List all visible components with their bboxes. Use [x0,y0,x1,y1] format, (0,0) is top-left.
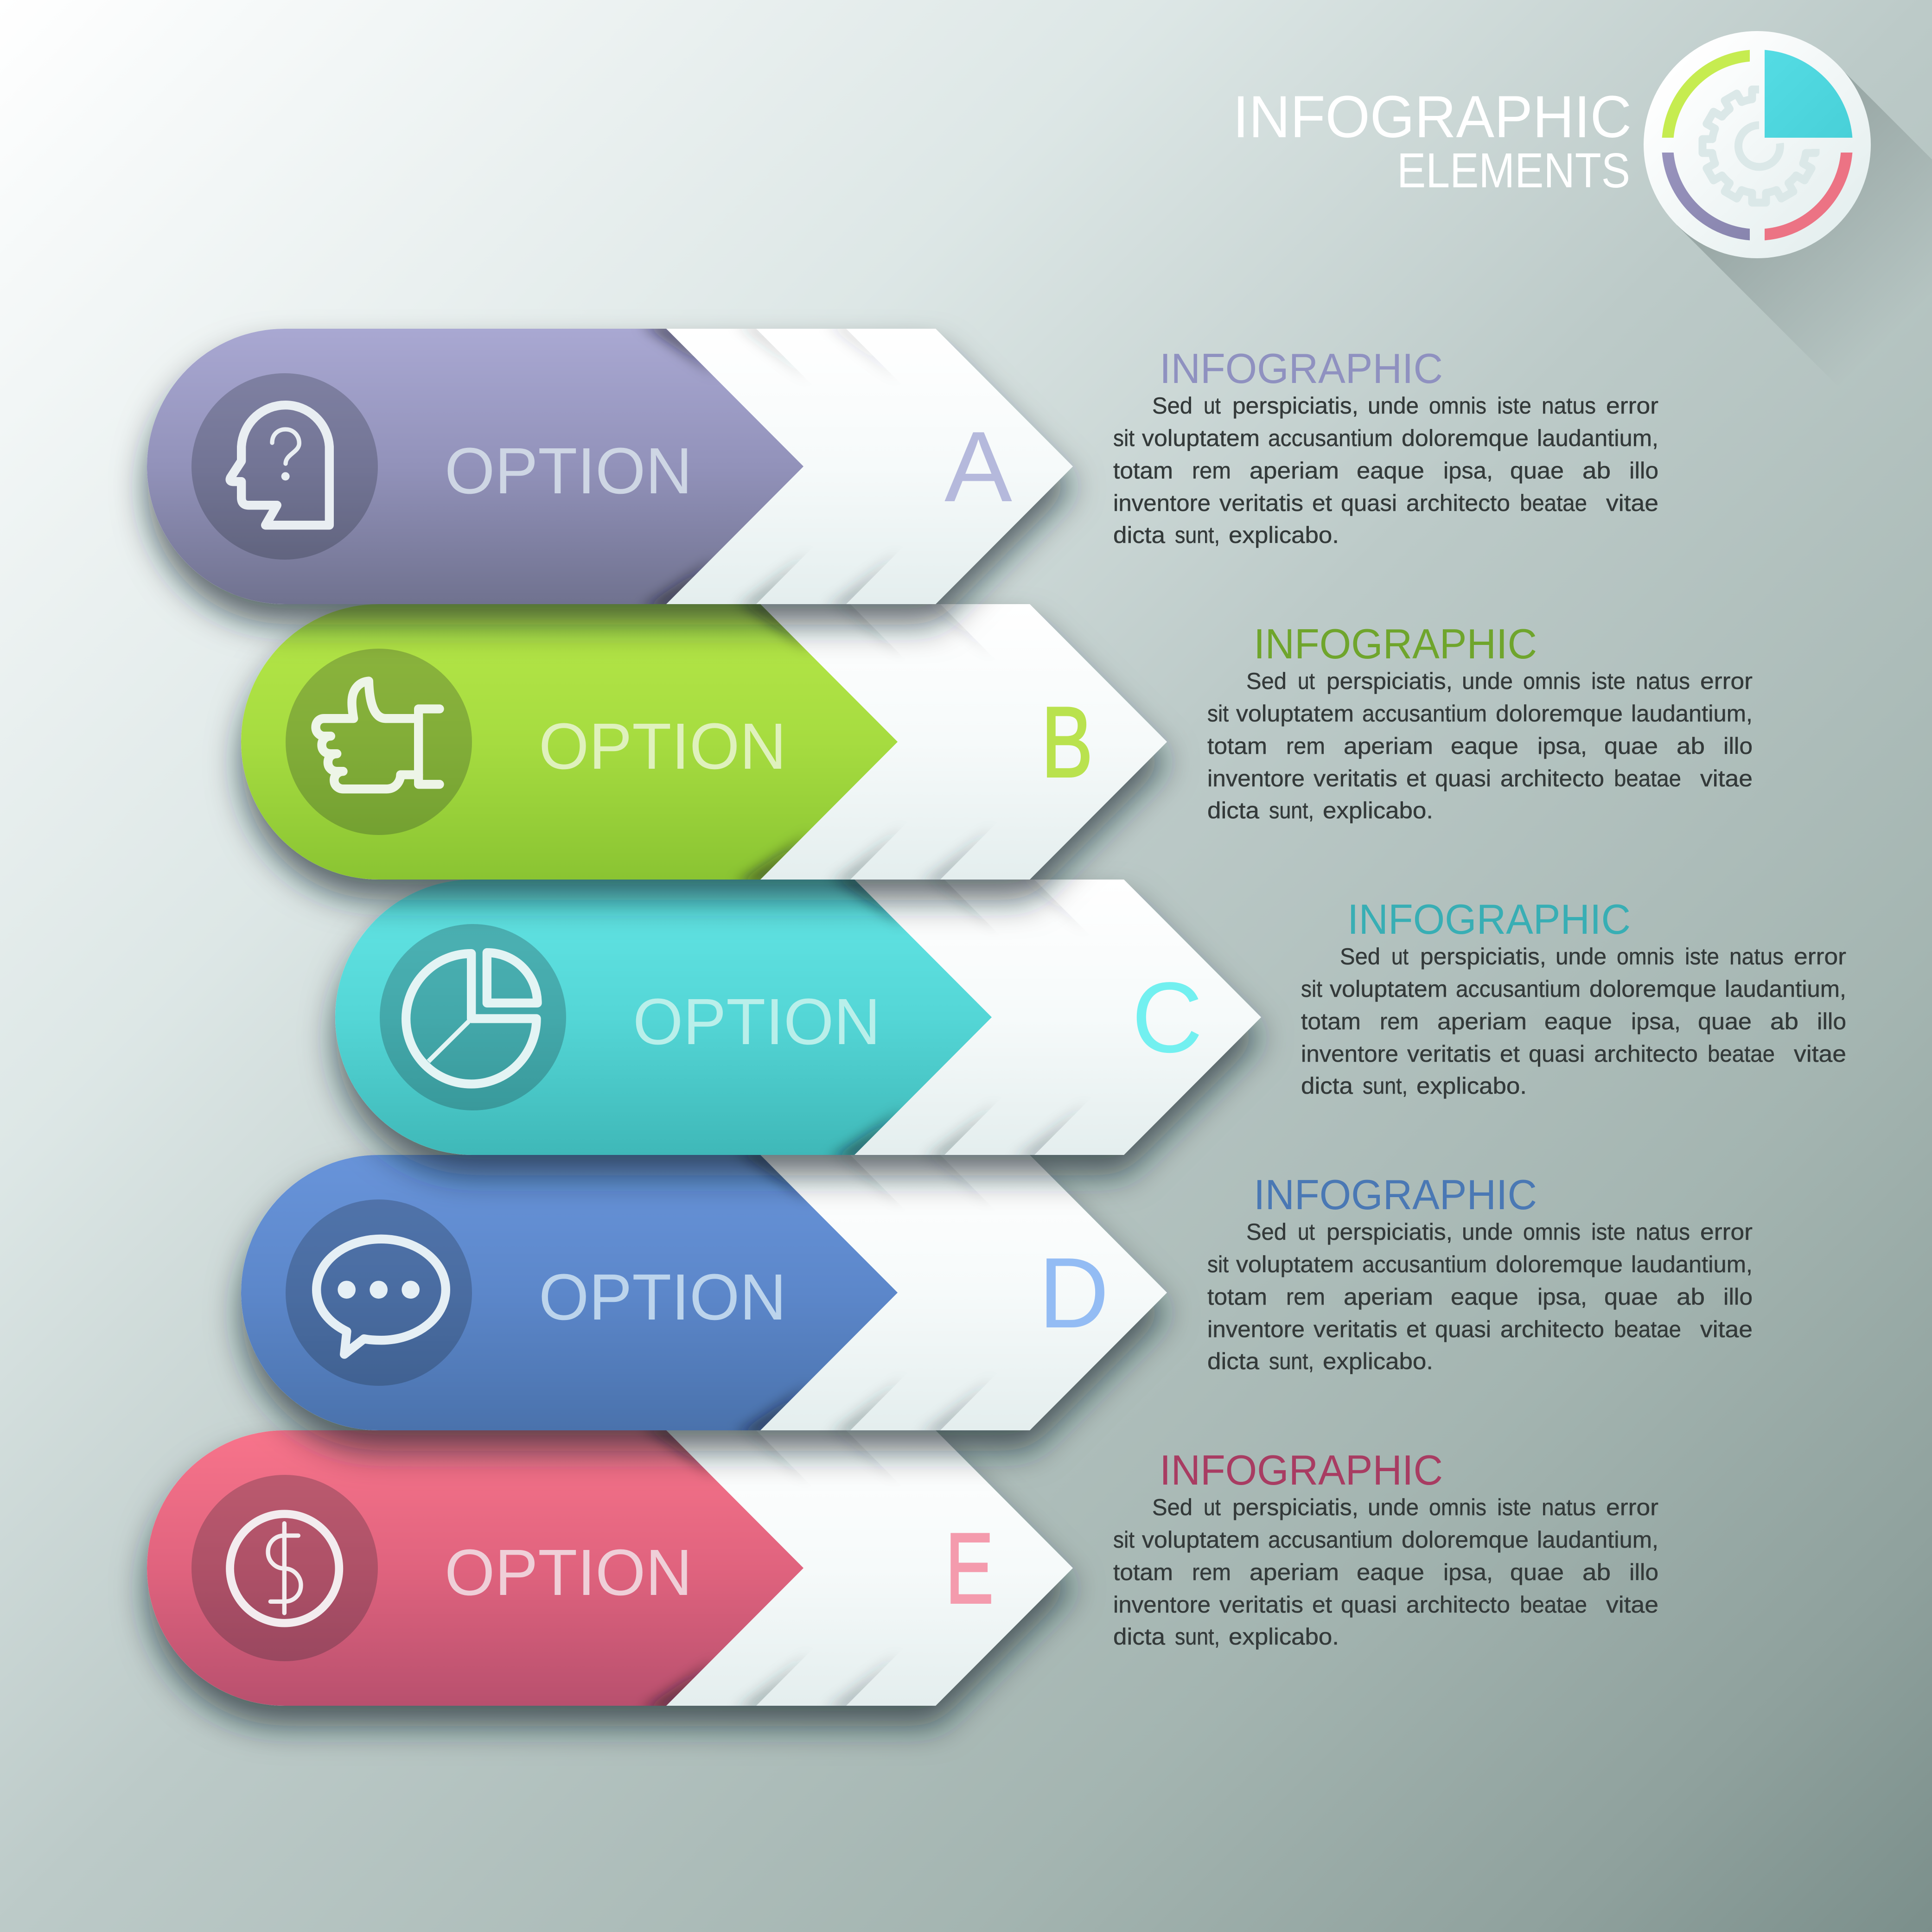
text block C: quasi [1529,1041,1585,1067]
text block A: veritatis [1219,490,1303,516]
text block C: accusantium [1456,976,1581,1002]
text block A: aperiam [1250,458,1339,484]
text block B: voluptatem [1236,701,1354,727]
text block C: illo [1817,1008,1846,1034]
panel: option A [147,324,1073,609]
text block B: beatae [1614,765,1681,791]
title: ELEMENTS [1397,143,1630,198]
text block B: iste [1591,668,1626,694]
text block B: ab [1677,733,1705,759]
text block D: illo [1723,1284,1753,1310]
text block B: aperiam [1344,733,1433,759]
text block A: omnis [1429,393,1486,419]
text block C: dicta [1301,1073,1353,1099]
text block D: eaque [1451,1284,1518,1310]
text block A: unde [1368,393,1419,419]
text block D: veritatis [1314,1316,1397,1342]
text block A: doloremque [1402,425,1529,451]
text block C: aperiam [1437,1008,1527,1034]
option label E: OPTION [445,1536,692,1609]
icon: thumbs up [316,681,440,789]
text block A: voluptatem [1142,425,1260,451]
text block E: sunt, [1175,1624,1220,1650]
text block C: unde [1556,944,1607,969]
text block D: accusantium [1362,1251,1487,1277]
text block A: laudantium, [1537,425,1658,451]
text block A: ut [1204,393,1221,419]
text block D: totam [1207,1284,1267,1310]
text block B: totam [1207,733,1267,759]
text block E: eaque [1357,1559,1424,1585]
text block A: architecto [1406,490,1510,516]
text block E: rem [1192,1559,1231,1585]
text block C: ipsa, [1631,1008,1681,1034]
text block E: quae [1510,1559,1564,1585]
panel: option D [241,1150,1167,1435]
text block B: omnis [1523,668,1581,694]
text block C: Sed [1340,944,1380,969]
text block E: ab [1582,1559,1611,1585]
text block E: sit [1113,1527,1135,1553]
icon: head with question mark [230,405,329,525]
letter A: A [944,410,1012,523]
text block B: perspiciatis, [1326,668,1453,694]
text block E: perspiciatis, [1232,1494,1358,1520]
text block A: error [1606,393,1658,419]
panel: option E [147,1426,1073,1710]
text block C: quae [1698,1008,1752,1034]
text block B: explicabo. [1323,797,1433,823]
text block E: Sed [1152,1494,1192,1520]
text block B: rem [1286,733,1325,759]
text block A: inventore [1113,490,1211,516]
text block D: inventore [1207,1316,1305,1342]
text block A: rem [1192,458,1231,484]
text block E: quasi [1341,1592,1397,1618]
text block E: omnis [1429,1494,1486,1520]
text block D: dicta [1207,1348,1259,1374]
header badge: gear and pie [1644,31,1871,258]
text block C: totam [1301,1008,1361,1034]
text block B: natus [1636,668,1690,694]
text block B: INFOGRAPHIC [1254,621,1537,668]
option label C: OPTION [633,985,880,1058]
text block D: explicabo. [1323,1348,1433,1374]
text block B: veritatis [1314,765,1397,791]
text block D: vitae [1700,1316,1753,1342]
text block D: beatae [1614,1316,1681,1342]
text block C: iste [1685,944,1719,969]
text block A: totam [1113,458,1173,484]
text block B: inventore [1207,765,1305,791]
text block B: ipsa, [1537,733,1587,759]
text block C: omnis [1617,944,1674,969]
text block D: et [1406,1316,1426,1342]
text block A: beatae [1520,490,1587,516]
letter C: C [1132,961,1203,1073]
text block A: sit [1113,425,1135,451]
text block D: sit [1207,1251,1229,1277]
text block E: natus [1542,1494,1596,1520]
text block E: illo [1629,1559,1658,1585]
text block C: rem [1380,1008,1419,1034]
text block B [1207,621,1753,823]
text block E: dicta [1113,1624,1165,1650]
text block C: ab [1770,1008,1798,1034]
text block B: quasi [1435,765,1491,791]
text block E: ut [1204,1494,1221,1520]
header badge long shadow [1677,65,1932,596]
text block A: perspiciatis, [1232,393,1358,419]
text block A: Sed [1152,393,1192,419]
text block B: sit [1207,701,1229,727]
text block C: architecto [1594,1041,1698,1067]
text block C: perspiciatis, [1420,944,1546,969]
text block D: doloremque [1496,1251,1623,1277]
text block B: ut [1298,668,1315,694]
text block D: quasi [1435,1316,1491,1342]
text block C: beatae [1708,1041,1775,1067]
text block B: eaque [1451,733,1518,759]
text block A: et [1312,490,1332,516]
text block D: voluptatem [1236,1251,1354,1277]
text block A: eaque [1357,458,1424,484]
text block A: illo [1629,458,1658,484]
text block D: INFOGRAPHIC [1254,1172,1537,1218]
text block C: voluptatem [1330,976,1447,1002]
text block D: ut [1298,1219,1315,1245]
text block D: natus [1636,1219,1690,1245]
text block D: architecto [1500,1316,1604,1342]
text block D: quae [1604,1284,1658,1310]
text block E: accusantium [1268,1527,1393,1553]
text block E: INFOGRAPHIC [1160,1447,1443,1494]
option label D: OPTION [539,1260,786,1333]
text block D: sunt, [1269,1348,1314,1374]
text block B: Sed [1246,668,1287,694]
text block E: architecto [1406,1592,1510,1618]
panel: option C [335,875,1261,1160]
text block B: et [1406,765,1426,791]
text block B: illo [1723,733,1753,759]
text block A: sunt, [1175,522,1220,548]
title: INFOGRAPHIC [1233,84,1632,150]
text block E: voluptatem [1142,1527,1260,1553]
text block A: natus [1542,393,1596,419]
icon: speech bubble [317,1239,446,1354]
text block C: sit [1301,976,1322,1002]
text block A: iste [1497,393,1531,419]
text block B: accusantium [1362,701,1487,727]
text block D: laudantium, [1631,1251,1753,1277]
text block A: quae [1510,458,1564,484]
letter B: B [1041,686,1093,798]
text block E: ipsa, [1443,1559,1493,1585]
text block D: aperiam [1344,1284,1433,1310]
text block B: doloremque [1496,701,1623,727]
text block C: et [1500,1041,1520,1067]
text block E: error [1606,1494,1658,1520]
text block A: explicabo. [1229,522,1339,548]
icon: dollar coin [230,1514,339,1623]
text block E: totam [1113,1559,1173,1585]
text block E: doloremque [1402,1527,1529,1553]
text block D [1207,1172,1753,1374]
panel: option B [241,599,1167,884]
text block D: Sed [1246,1219,1287,1245]
text block E: laudantium, [1537,1527,1658,1553]
text block E: inventore [1113,1592,1211,1618]
text block D: ipsa, [1537,1284,1587,1310]
text block C [1301,896,1846,1099]
text block C: error [1794,944,1846,969]
text block A: accusantium [1268,425,1393,451]
letter D: D [1039,1237,1109,1349]
text block A: INFOGRAPHIC [1160,345,1443,392]
text block C: explicabo. [1416,1073,1527,1099]
text block E: unde [1368,1494,1419,1520]
text block E: et [1312,1592,1332,1618]
text block B: dicta [1207,797,1259,823]
text block A [1113,345,1658,548]
text block E: iste [1497,1494,1531,1520]
text block D: unde [1462,1219,1513,1245]
icon: pie chart [406,953,537,1084]
text block B: vitae [1700,765,1753,791]
text block C: eaque [1544,1008,1612,1034]
text block D: rem [1286,1284,1325,1310]
text block E: beatae [1520,1592,1587,1618]
text block E: aperiam [1250,1559,1339,1585]
text block D: error [1700,1219,1753,1245]
text block D: ab [1677,1284,1705,1310]
text block B: laudantium, [1631,701,1753,727]
text block C: ut [1391,944,1409,969]
text block C: vitae [1794,1041,1846,1067]
text block E [1113,1447,1658,1650]
text block E: vitae [1606,1592,1658,1618]
text block A: ab [1582,458,1611,484]
text block D: iste [1591,1219,1626,1245]
text block A: quasi [1341,490,1397,516]
option label B: OPTION [539,709,786,783]
text block A: vitae [1606,490,1658,516]
text block C: doloremque [1589,976,1716,1002]
text block E: explicabo. [1229,1624,1339,1650]
text block D: perspiciatis, [1326,1219,1453,1245]
text block B: quae [1604,733,1658,759]
title [1233,84,1632,198]
text block C: INFOGRAPHIC [1347,896,1631,943]
text block A: ipsa, [1443,458,1493,484]
text block D: omnis [1523,1219,1581,1245]
text block B: sunt, [1269,797,1314,823]
text block C: veritatis [1407,1041,1491,1067]
text block B: error [1700,668,1753,694]
text block A: dicta [1113,522,1165,548]
text block B: unde [1462,668,1513,694]
text block B: architecto [1500,765,1604,791]
text block C: laudantium, [1725,976,1846,1002]
text block C: inventore [1301,1041,1398,1067]
text block C: natus [1729,944,1784,969]
letter E: E [945,1512,994,1624]
text block E: veritatis [1219,1592,1303,1618]
option label A: OPTION [445,434,692,507]
text block C: sunt, [1363,1073,1408,1099]
